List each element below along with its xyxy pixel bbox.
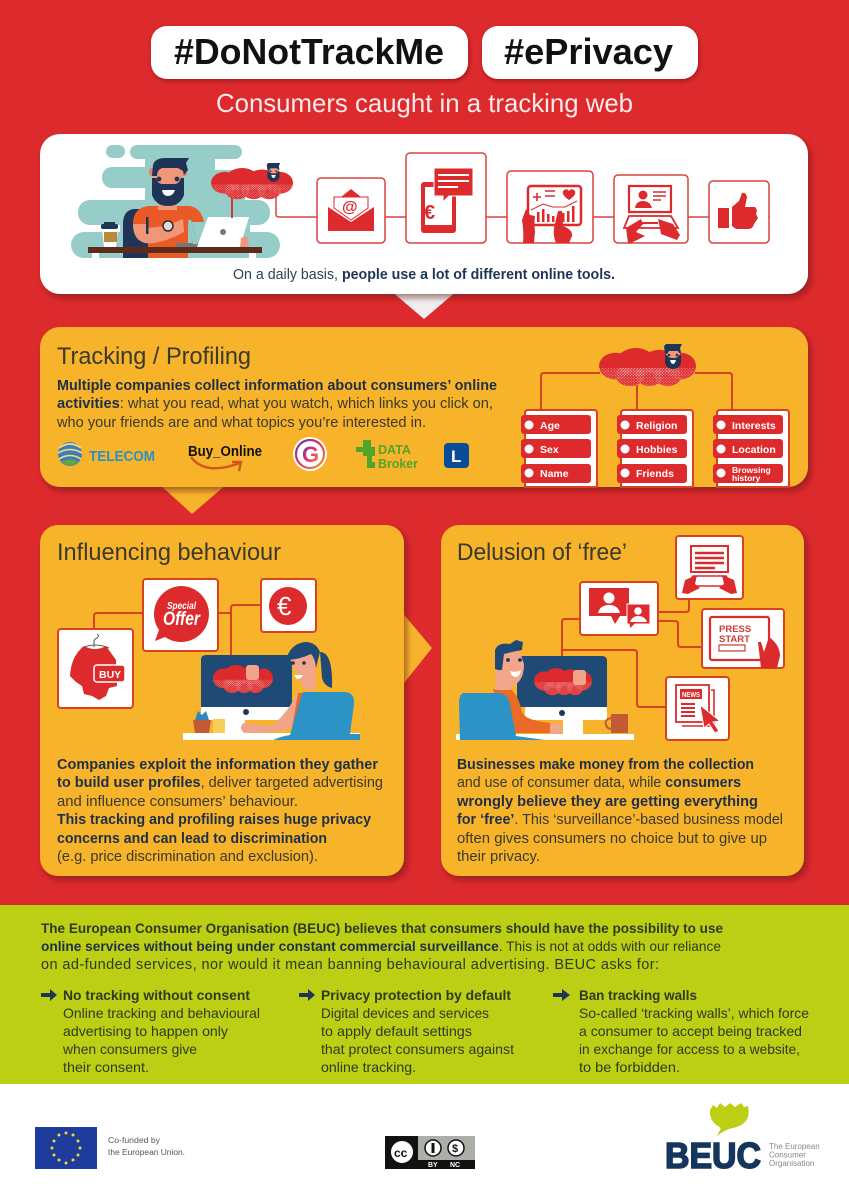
text block: Multiple companies collect information about consumers’ online <box>57 378 497 394</box>
logo: L: L <box>451 447 461 466</box>
text: online tools caption: On a daily basis, people use a lot of different online tools. <box>233 267 615 283</box>
text block: (e.g. price discrimination and exclusion). <box>57 849 318 865</box>
icon: euro: € <box>277 591 292 621</box>
logo: telecom: TELECOM <box>89 449 155 465</box>
footer: EU funding: the European Union. <box>108 1148 185 1157</box>
footer: creative commons badge: BY <box>428 1162 438 1169</box>
data card: religion hobbies friends: Religion <box>636 420 677 432</box>
ask: no tracking without consent: No tracking without consent <box>63 987 250 1003</box>
heading: Tracking / Profiling <box>57 343 251 370</box>
text block: often gives consumers no choice but to give up <box>457 831 767 847</box>
heading: Influencing behaviour <box>57 539 281 566</box>
footer: BEUC logo <box>665 1103 820 1176</box>
footer: BEUC logo: The European <box>769 1142 820 1151</box>
icon: laptop <box>676 536 743 599</box>
logo: data broker <box>356 440 418 471</box>
icon: cloud with pole <box>211 163 770 218</box>
data card: age sex name: Name <box>540 468 569 480</box>
illustration: man at laptop <box>71 145 280 258</box>
icon: press start tablet <box>702 609 784 668</box>
footer: BEUC logo: Organisation <box>769 1159 814 1168</box>
icon: special offer <box>143 579 218 651</box>
ask: privacy protection by default: to apply default settings <box>321 1023 472 1039</box>
panel: BEUC position <box>0 905 849 1084</box>
text block: to build user profiles, deliver targeted advertising <box>57 775 383 791</box>
logo: G: G <box>302 442 319 467</box>
title: hashtag pills: #DoNotTrackMe <box>174 31 444 72</box>
icon: chat profiles <box>580 582 658 635</box>
data card: interests location browsing history: Location <box>732 444 776 456</box>
logo: data broker: DATA <box>378 443 411 457</box>
text block <box>56 378 497 431</box>
footer: EU funding: Co-funded by <box>108 1136 160 1145</box>
footer: creative commons badge <box>385 1136 475 1169</box>
red background <box>0 0 849 905</box>
logo: G <box>293 437 327 471</box>
footer: creative commons badge: $ <box>452 1143 458 1155</box>
illustration: man at computer <box>456 640 634 740</box>
icon: clothing buy <box>58 629 133 708</box>
text block: who your friends are and what topics you’re interested in. <box>56 415 426 431</box>
ask: no tracking without consent <box>41 987 260 1075</box>
text: intro: online services without being under constant commercial surveillance. This is not at odds with our reliance <box>41 938 721 954</box>
ask: no tracking without consent: Online tracking and behavioural <box>63 1005 260 1021</box>
icon: tablet payment: € <box>424 202 435 224</box>
footer: EU funding <box>35 1127 185 1169</box>
panel: delusion of free <box>441 525 804 876</box>
icon: data dashboard with hands <box>507 171 593 243</box>
logo: L <box>444 443 469 468</box>
panel: tracking and profiling <box>40 327 808 514</box>
text block: Businesses make money from the collection <box>457 757 754 773</box>
title: hashtag pills <box>151 26 698 79</box>
ask: privacy protection by default: that protect consumers against <box>321 1041 514 1057</box>
ask: no tracking without consent: their consent. <box>63 1059 149 1075</box>
illustration: woman at computer <box>183 642 360 740</box>
icon: euro <box>261 579 316 632</box>
data card: religion hobbies friends: Hobbies <box>636 444 678 456</box>
subtitle: Consumers caught in a tracking web <box>216 88 633 118</box>
logo: Buy_Online <box>188 444 262 471</box>
icon: news <box>666 677 729 740</box>
data card: religion hobbies friends: Friends <box>636 468 674 480</box>
footer: BEUC logo: Consumer <box>769 1150 806 1160</box>
data card: interests location browsing history: history <box>732 473 761 483</box>
text block: and influence consumers’ behaviour. <box>57 794 298 810</box>
logo: telecom <box>58 442 155 466</box>
footer: creative commons badge: NC <box>450 1162 460 1169</box>
icon: clothing buy: BUY <box>99 669 121 681</box>
text: intro: The European Consumer Organisation (BEUC) believes that consumers should have the possibility to use <box>41 920 723 936</box>
ask: no tracking without consent: when consumers give <box>62 1041 197 1057</box>
text block: and use of consumer data, while consumers <box>457 775 741 791</box>
ask: ban tracking walls: Ban tracking walls <box>579 987 697 1003</box>
title: hashtag pills: #ePrivacy <box>504 31 673 72</box>
text block: concerns and can lead to discrimination <box>57 831 327 847</box>
icon: press start tablet: PRESS <box>719 624 751 635</box>
panel: online tools <box>40 134 808 319</box>
arrow: influencing to delusion <box>400 610 432 688</box>
icon: special offer: Special <box>167 601 196 612</box>
panel: influencing behaviour <box>40 525 404 876</box>
ask: ban tracking walls: a consumer to accept being tracked <box>579 1023 802 1039</box>
footer: creative commons badge: cc <box>394 1146 408 1160</box>
text: intro <box>41 920 723 973</box>
data card: interests location browsing history <box>713 410 789 487</box>
text block: activities: what you read, what you watch, which links you click on, <box>57 396 493 412</box>
icon: press start tablet: START <box>719 634 750 645</box>
data card: religion hobbies friends <box>617 410 693 487</box>
ask: ban tracking walls: in exchange for access to a website, <box>579 1041 800 1057</box>
data card: interests location browsing history: Browsing <box>732 465 771 475</box>
data card: age sex name <box>521 410 597 487</box>
text block: for ‘free’. This ‘surveillance’-based business model <box>457 812 783 828</box>
ask: ban tracking walls: to be forbidden. <box>579 1059 680 1075</box>
text block: This tracking and profiling raises huge privacy <box>57 812 371 828</box>
icon: tablet payment <box>406 153 486 243</box>
illustration: connectors <box>94 605 261 667</box>
text block: wrongly believe they are getting everything <box>456 794 758 810</box>
text: intro: on ad-funded services, nor would it mean banning behavioural advertising. BEUC asks for: <box>41 957 659 973</box>
ask: ban tracking walls: So-called ‘tracking walls’, which force <box>579 1005 809 1021</box>
text block <box>456 757 783 865</box>
ask: privacy protection by default: Privacy protection by default <box>321 987 511 1003</box>
icon: laptop with person <box>614 175 688 243</box>
ask: privacy protection by default <box>299 987 514 1075</box>
footer: BEUC logo: BEUC <box>665 1135 761 1176</box>
icon: thumbs up <box>709 181 769 243</box>
logo: Buy_Online: Buy_Online <box>188 444 262 460</box>
ask: privacy protection by default: online tracking. <box>321 1059 416 1075</box>
ask: privacy protection by default: Digital devices and services <box>321 1005 489 1021</box>
diagram: profile tree <box>521 344 789 487</box>
ask: no tracking without consent: advertising to happen only <box>63 1023 228 1039</box>
ask: ban tracking walls <box>553 987 809 1075</box>
icon: email <box>317 178 385 243</box>
logo: data broker: Broker <box>378 457 418 471</box>
illustration: connectors <box>562 599 702 707</box>
icon: email: @ <box>342 199 358 216</box>
data card: age sex name: Age <box>540 420 560 432</box>
data card: interests location browsing history: Interests <box>732 420 776 432</box>
data card: age sex name: Sex <box>540 444 559 456</box>
text block: their privacy. <box>457 849 540 865</box>
icon: news: NEWS <box>682 690 700 699</box>
heading: Delusion of ‘free’ <box>457 539 627 566</box>
icon: special offer: Offer <box>163 609 201 630</box>
text block <box>57 757 383 865</box>
text block: Companies exploit the information they gather <box>57 757 378 773</box>
